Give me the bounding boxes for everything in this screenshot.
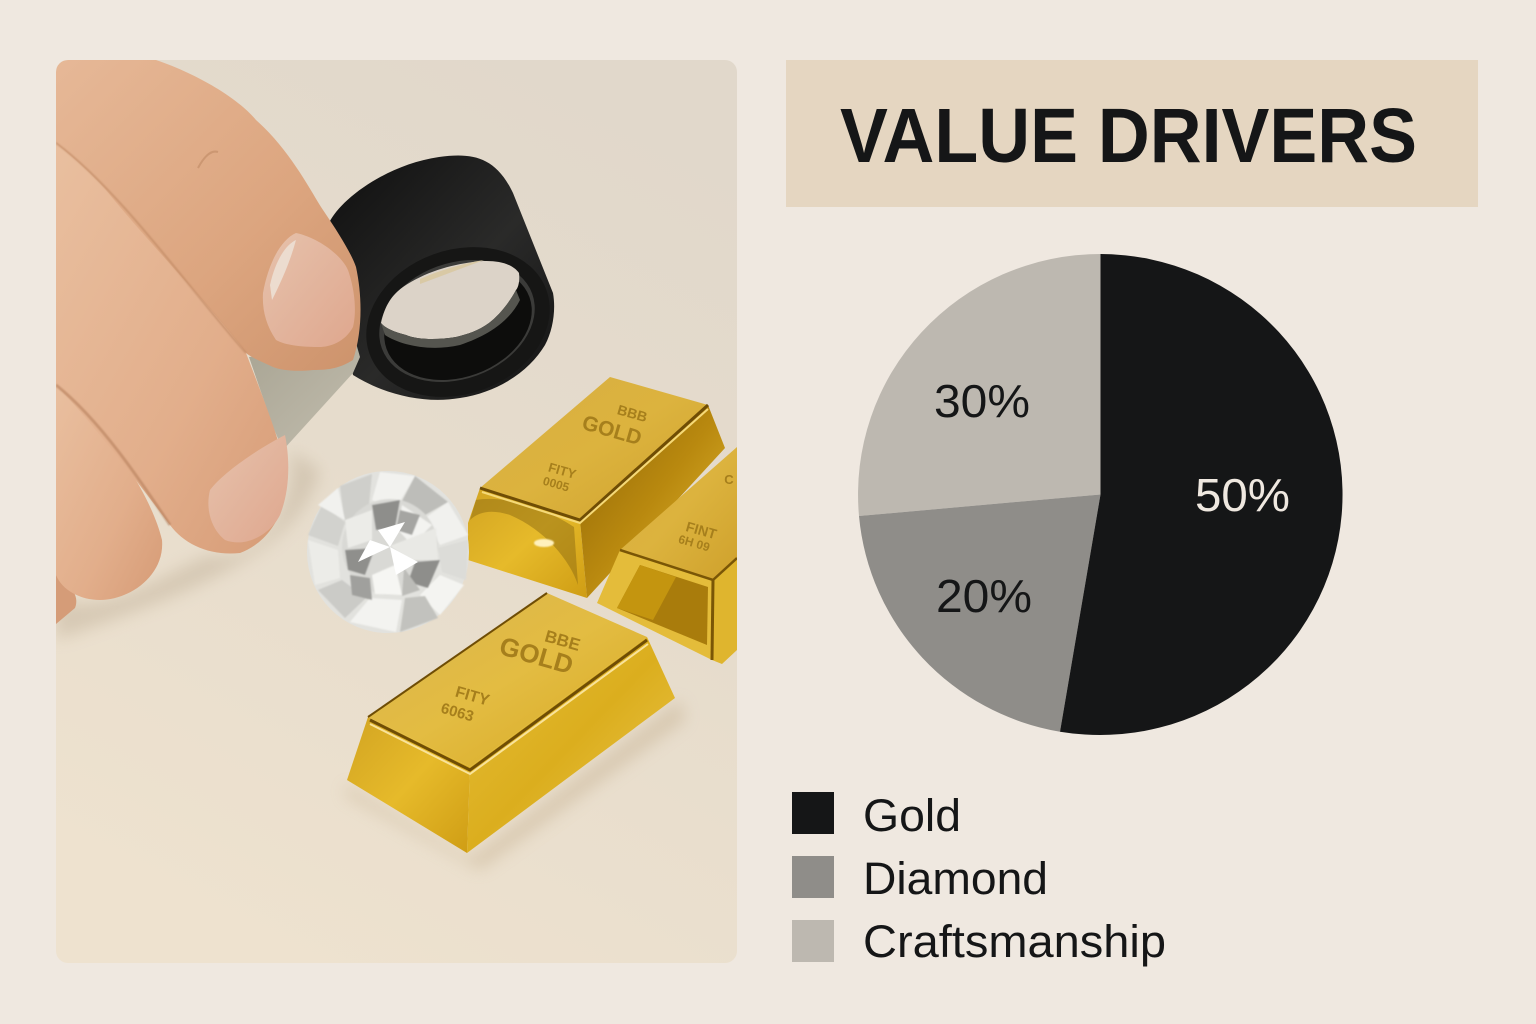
icon: diamond — [307, 471, 469, 633]
legend — [792, 790, 1166, 967]
icon: gold bar right: C — [724, 472, 734, 487]
icon: gold bar front: GOLD — [496, 631, 577, 680]
label: 20%: 20% — [936, 570, 1032, 622]
label: 30%: 30% — [934, 375, 1030, 427]
icon: gold bar back: FITY — [547, 460, 578, 482]
legend label: craftsmanship: Craftsmanship — [863, 916, 1166, 967]
icon: gold bar front: FITY — [453, 684, 492, 710]
icon: loupe — [330, 156, 554, 400]
slice: diamond 20% — [859, 494, 1100, 732]
icon: gold bar back: BBB — [616, 401, 649, 425]
panel: photo of loupe, diamond and gold bars — [56, 60, 737, 963]
legend swatch: craftsmanship — [792, 920, 834, 962]
legend label: diamond: Diamond — [863, 853, 1048, 904]
slice: gold 50% — [1060, 254, 1343, 735]
legend label: gold: Gold — [863, 790, 961, 841]
icon: hand holding loupe — [56, 60, 361, 624]
icon: loupe swivel plate — [249, 343, 360, 450]
icon: gold bar back: GOLD — [579, 411, 644, 450]
heading banner — [786, 60, 1478, 207]
pie chart — [858, 254, 1343, 735]
icon: gold bar front — [345, 593, 685, 870]
icon: gold bar back — [468, 377, 725, 598]
label: 50%: 50% — [1195, 469, 1290, 521]
icon: gold bar right — [597, 447, 737, 664]
icon: gold bar front: 6063 — [439, 700, 476, 725]
slice: craftsmanship 30% — [858, 254, 1100, 516]
icon: gold bar front: BBE — [543, 627, 582, 655]
icon: gold bar right: 6H 09 — [677, 532, 712, 554]
legend swatch: diamond — [792, 856, 834, 898]
icon: gold bar back: 0005 — [541, 474, 571, 495]
heading text: VALUE DRIVERS — [840, 93, 1417, 179]
legend swatch: gold — [792, 792, 834, 834]
icon: gold bar right: FINT — [684, 518, 719, 542]
